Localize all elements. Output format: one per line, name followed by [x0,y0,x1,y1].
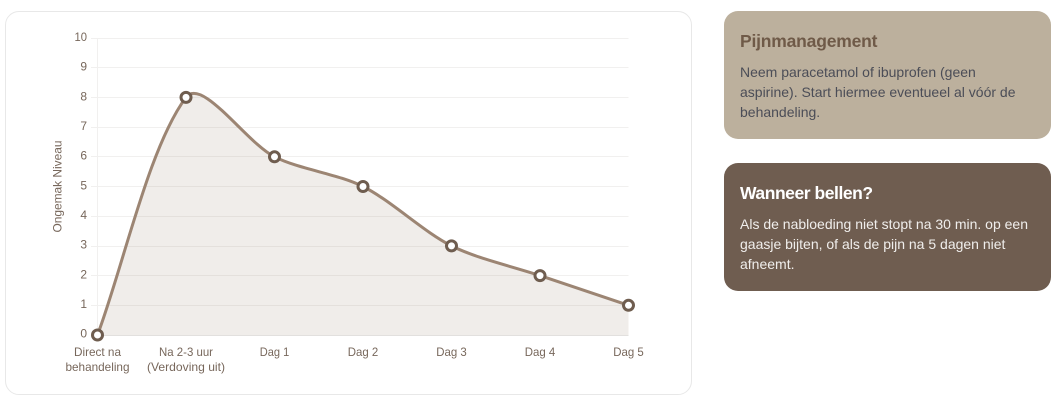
text: when to call advice: Als de nabloeding niet stopt na 30 min. op een [740,216,1028,232]
data points [92,92,634,340]
text: pijnmanagement advice: behandeling. [740,104,820,120]
y-axis labels: 0 [80,326,87,340]
data line [98,93,628,335]
text: pijnmanagement advice [740,64,1015,120]
text: when to call advice: afneemt. [740,256,794,272]
y-axis labels: 8 [80,90,87,104]
x-axis labels: (Verdoving uit) [147,360,225,374]
x-axis labels: Na 2-3 uur [159,345,213,359]
x-axis labels: Dag 5 [613,345,644,359]
x-axis labels: Dag 1 [260,345,290,359]
text: when to call advice [740,216,1028,272]
x-axis labels: behandeling [66,360,130,374]
y-axis labels: 4 [80,208,87,222]
panel: chart card [5,11,692,395]
y-axis labels: 7 [80,119,87,133]
heading: wanneer bellen: Wanneer bellen? [740,183,873,203]
y-axis labels: 10 [74,30,87,44]
panel: pijnmanagement [724,11,1051,139]
y-axis labels: 9 [80,60,87,74]
heading: pijnmanagement: Pijnmanagement [740,31,877,51]
y-axis labels: 3 [80,238,87,252]
x-axis labels: Dag 4 [525,345,556,359]
area fill [98,93,628,335]
panel: wanneer bellen [724,163,1051,291]
y-axis title: Ongemak Niveau [50,140,64,232]
y-axis labels: 1 [80,297,87,311]
y-axis labels: 2 [80,268,87,282]
chart: ongemak niveau line chart [50,30,644,374]
x-axis labels: Dag 2 [348,345,379,359]
x-axis labels: Dag 3 [436,345,467,359]
x-axis labels: Direct na [74,345,121,359]
x-axis labels [66,345,644,374]
text: pijnmanagement advice: aspirine). Start hiermee eventueel al vóór de [740,84,1015,100]
y-axis labels: 6 [80,148,87,162]
y-axis labels: 5 [80,178,87,192]
y-axis labels [74,30,87,340]
text: pijnmanagement advice: Neem paracetamol of ibuprofen (geen [740,64,976,80]
text: when to call advice: gaasje bijten, of als de pijn na 5 dagen niet [740,236,1005,252]
